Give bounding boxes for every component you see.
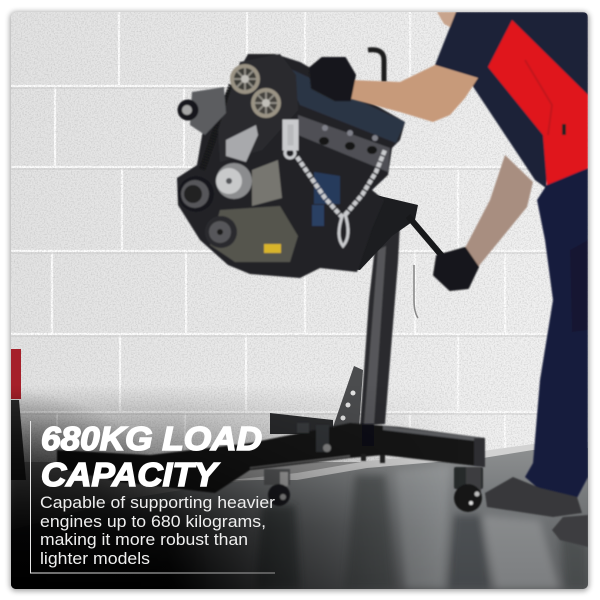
upper glove [310, 58, 355, 100]
body text: Capable of supporting heavier [40, 494, 276, 512]
heading [41, 420, 262, 493]
head [437, 12, 458, 28]
engine block [177, 54, 405, 278]
stand: base beam [57, 423, 485, 493]
engine [177, 50, 405, 278]
caption frame rule [30, 421, 275, 573]
floor [11, 446, 588, 589]
left caster [264, 469, 290, 506]
caption block [30, 420, 276, 573]
dark gradient overlay [11, 390, 439, 589]
rear shoe [552, 515, 588, 547]
brick wall [11, 12, 590, 462]
hanging chain on lever [414, 265, 418, 318]
stand: angled brace [333, 366, 363, 428]
AC compressor [205, 206, 298, 262]
shirt red panel [488, 20, 588, 185]
body text: engines up to 680 kilograms, [40, 513, 266, 531]
heading: CAPACITY [41, 456, 220, 493]
timing cover [218, 54, 298, 162]
forearm [347, 65, 478, 122]
engine head mount plate [356, 195, 418, 270]
trousers [525, 168, 588, 498]
stand: rear leg [270, 413, 333, 434]
body text: making it more robust than [40, 531, 248, 549]
lower glove [434, 248, 478, 290]
dipstick pipe [368, 50, 384, 82]
blue intake parts [314, 172, 340, 204]
red jack at left edge [11, 349, 26, 480]
alternator unit [178, 87, 226, 135]
body text [40, 494, 276, 568]
handle bar [408, 216, 442, 256]
front shoe [485, 477, 582, 517]
mechanic [310, 12, 588, 547]
crank pulleys [178, 160, 282, 212]
left corner darkening [11, 396, 161, 589]
back arm [465, 155, 533, 267]
shirt navy [435, 12, 588, 188]
valve cover [292, 70, 405, 144]
right caster [454, 467, 483, 512]
upper cam pulleys [230, 64, 281, 118]
stand: vertical column [360, 224, 400, 426]
body text: lighter models [40, 550, 150, 568]
timing belt [202, 85, 232, 170]
bracket and chain [285, 122, 385, 246]
heading: 680KG LOAD [41, 420, 262, 457]
floor reflections [255, 465, 588, 589]
